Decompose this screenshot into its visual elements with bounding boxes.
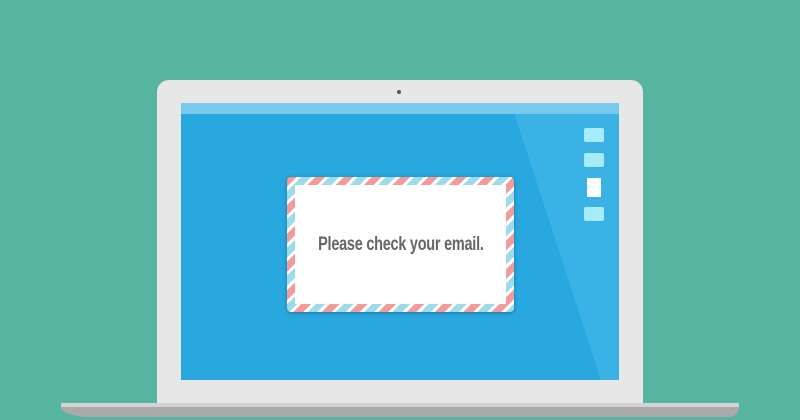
screen bbox=[181, 103, 619, 380]
envelope bbox=[287, 177, 514, 312]
message bbox=[295, 185, 506, 304]
icon: folder bbox=[584, 128, 604, 142]
camera bbox=[397, 90, 401, 94]
laptop base bbox=[61, 403, 739, 417]
message: Please check your email. bbox=[318, 234, 483, 254]
screen highlight bbox=[181, 103, 619, 380]
laptop lid bbox=[157, 80, 643, 410]
icon: folder bbox=[584, 207, 604, 221]
icon: document bbox=[587, 178, 601, 197]
icon: folder bbox=[584, 153, 604, 167]
